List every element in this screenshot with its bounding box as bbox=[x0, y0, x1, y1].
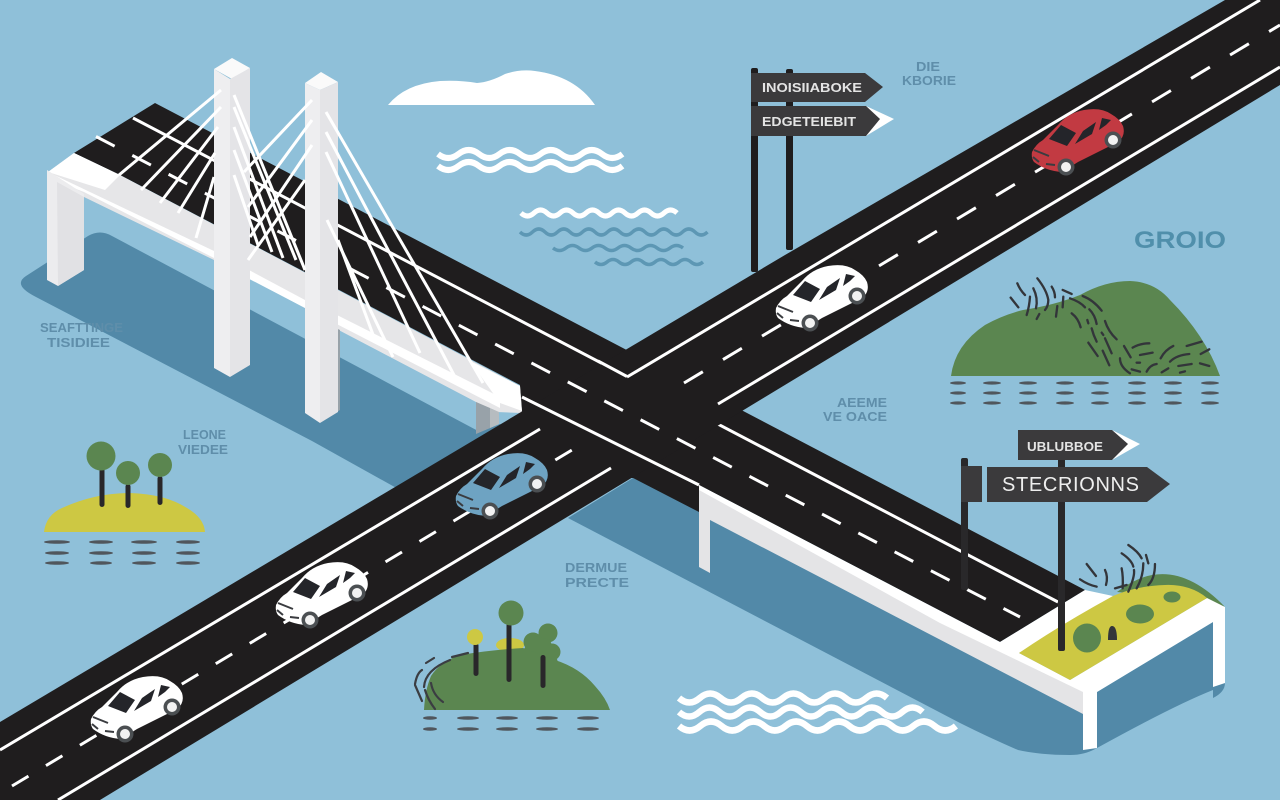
island: yellow with three trees bbox=[44, 442, 205, 565]
waves: lower white bbox=[679, 694, 956, 730]
front left leg bbox=[47, 170, 84, 286]
tower two bbox=[305, 72, 338, 423]
road running north-west to south-east bbox=[74, 103, 1085, 642]
label: yellow island: VIEDEE bbox=[178, 442, 228, 457]
island: large green hill, right bbox=[950, 278, 1220, 405]
tower one bbox=[214, 58, 250, 377]
waves: upper white bbox=[438, 150, 622, 170]
label: lower centre: DERMUE bbox=[565, 560, 627, 575]
label: under bridge left: TISIDIEE bbox=[47, 335, 110, 350]
signpost bottom right: UBLUBBOE bbox=[1027, 439, 1103, 454]
label: under bridge left bbox=[40, 320, 123, 350]
label: large teal word: GROIO bbox=[1134, 227, 1226, 254]
island: green with trees, lower centre bbox=[415, 600, 610, 731]
label: under bridge left: SEAFTTINGE bbox=[40, 320, 123, 335]
label: lower centre bbox=[565, 560, 629, 590]
signpost bottom right bbox=[961, 430, 1170, 651]
label: lower centre: PRECTE bbox=[565, 575, 629, 590]
signpost top: INOISIIABOKE bbox=[762, 80, 862, 95]
label: centre right: AEEME bbox=[837, 395, 887, 410]
cable-stayed bridge bbox=[47, 58, 522, 434]
label: centre right bbox=[823, 395, 887, 424]
label: top right of sign: DIE bbox=[916, 59, 940, 74]
label: yellow island bbox=[178, 427, 228, 457]
label: top right of sign bbox=[902, 59, 956, 88]
label: centre right: VE OACE bbox=[823, 409, 887, 424]
deck end white parts bbox=[48, 153, 522, 411]
stay cables bbox=[119, 90, 483, 383]
road B edge line and centre dashes bbox=[96, 118, 1058, 602]
car: blue bbox=[456, 453, 548, 520]
label: yellow island: LEONE bbox=[183, 427, 226, 442]
cloud island bbox=[388, 70, 595, 105]
road shadow south of crossing bbox=[568, 478, 1097, 755]
bridge shadow on water bbox=[21, 232, 520, 490]
right landing platform and green island bbox=[699, 485, 1225, 750]
car: red bbox=[1032, 109, 1124, 176]
signpost top bbox=[751, 68, 894, 272]
signpost bottom right: STECRIONNS bbox=[1002, 474, 1139, 496]
waves: middle white and blue bbox=[520, 210, 708, 264]
bridge deck slab bbox=[48, 153, 522, 413]
cars bbox=[91, 109, 1124, 743]
label: top right of sign: KBORIE bbox=[902, 73, 956, 88]
car: white centre left bbox=[276, 562, 368, 628]
under-deck supports bbox=[329, 325, 499, 434]
car: white upper road bbox=[776, 265, 868, 332]
signpost top: EDGETEIEBIT bbox=[762, 114, 856, 129]
car: white near left bbox=[91, 676, 183, 742]
